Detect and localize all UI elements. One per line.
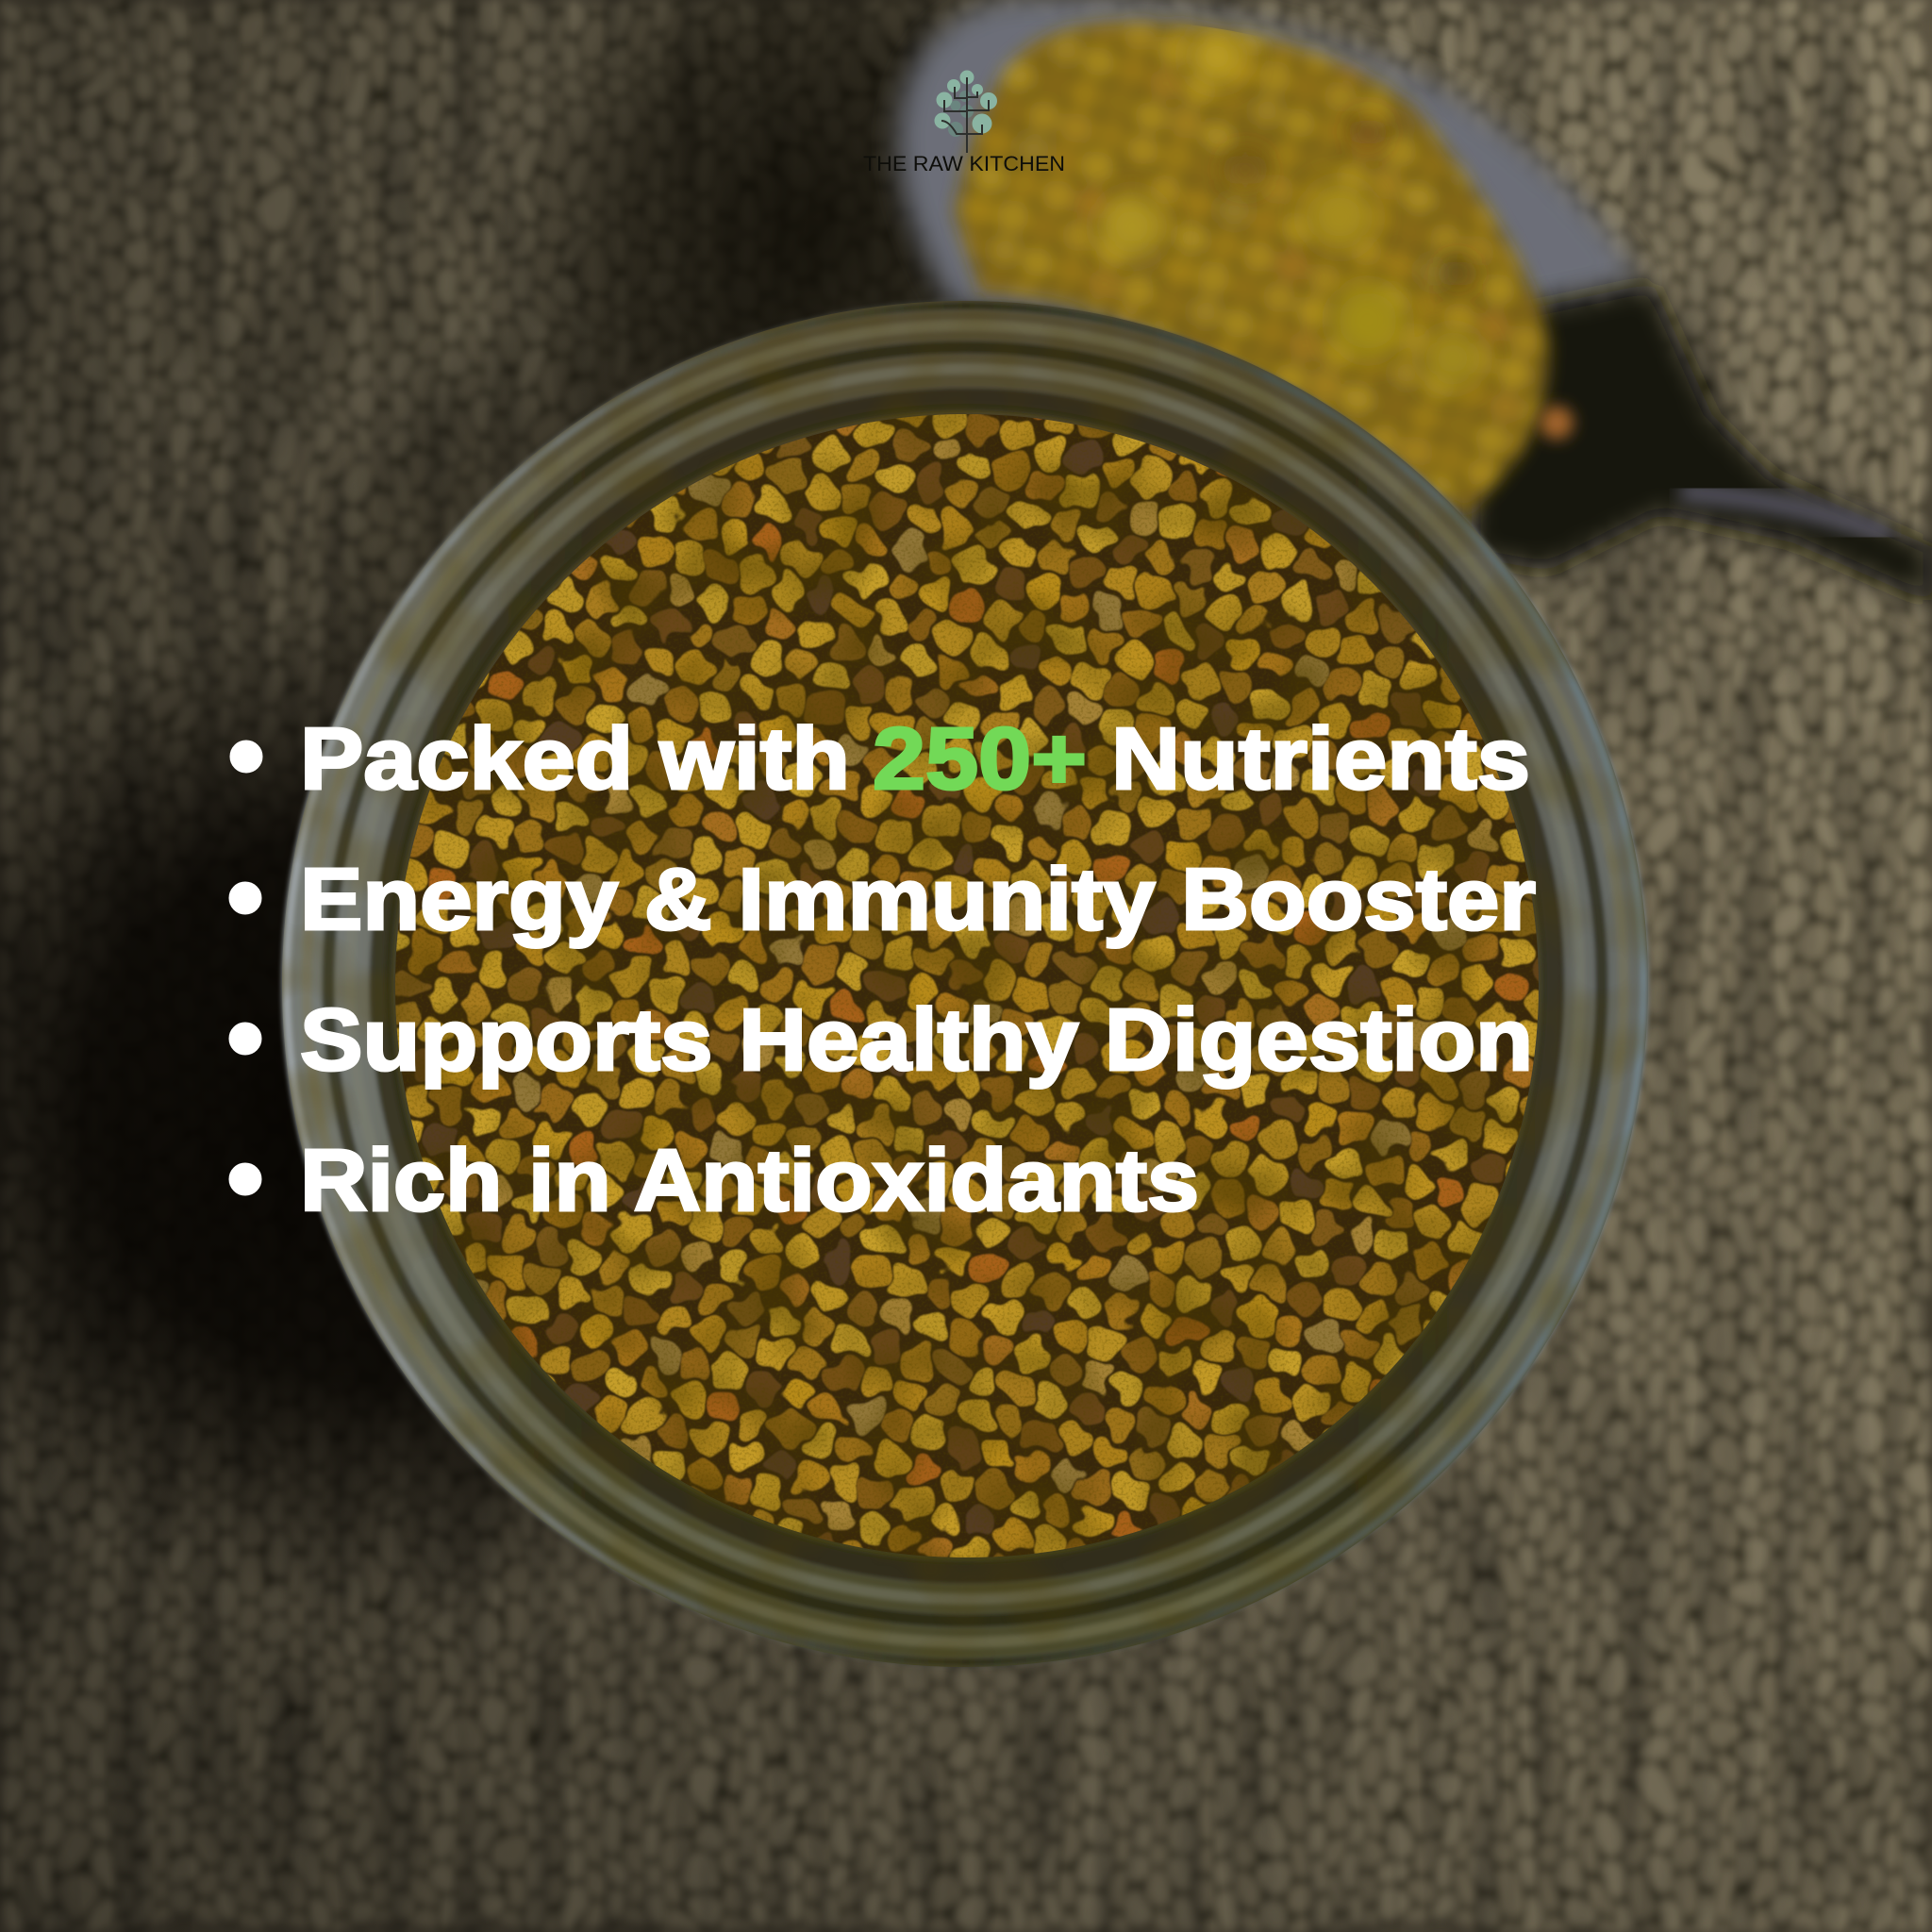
jar outer glass — [282, 301, 1648, 1667]
item: digestion: Supports Healthy Digestion — [300, 991, 1533, 1089]
jar glass mottling — [274, 292, 1660, 1679]
logo tree icon — [934, 70, 997, 153]
spoon silver rim — [898, 0, 1641, 311]
pollen grains — [377, 396, 1557, 1575]
item: nutrients: 250+ — [873, 709, 1087, 808]
spoon handle highlight — [1689, 492, 1882, 533]
item: nutrients: Packed with — [300, 709, 850, 808]
spoon dark metal bowl and handle — [1472, 283, 1932, 604]
item: nutrients — [231, 709, 1530, 808]
spoon pollen clumps — [1100, 28, 1481, 387]
logo wordmark: THE RAW KITCHEN — [863, 152, 1065, 175]
jar shadow — [0, 0, 1123, 1613]
logo — [863, 70, 1065, 175]
jar — [274, 292, 1660, 1679]
spoon pollen — [943, 0, 1566, 528]
stray pollen grain — [1540, 406, 1574, 440]
jar rim rings — [287, 306, 1643, 1662]
item: antioxidants: Rich in Antioxidants — [300, 1131, 1199, 1229]
item: nutrients: Nutrients — [1111, 709, 1530, 808]
spoon — [898, 0, 1932, 604]
benefits list — [230, 709, 1536, 1229]
item: energy and immunity: Energy & Immunity Booster — [300, 850, 1536, 948]
